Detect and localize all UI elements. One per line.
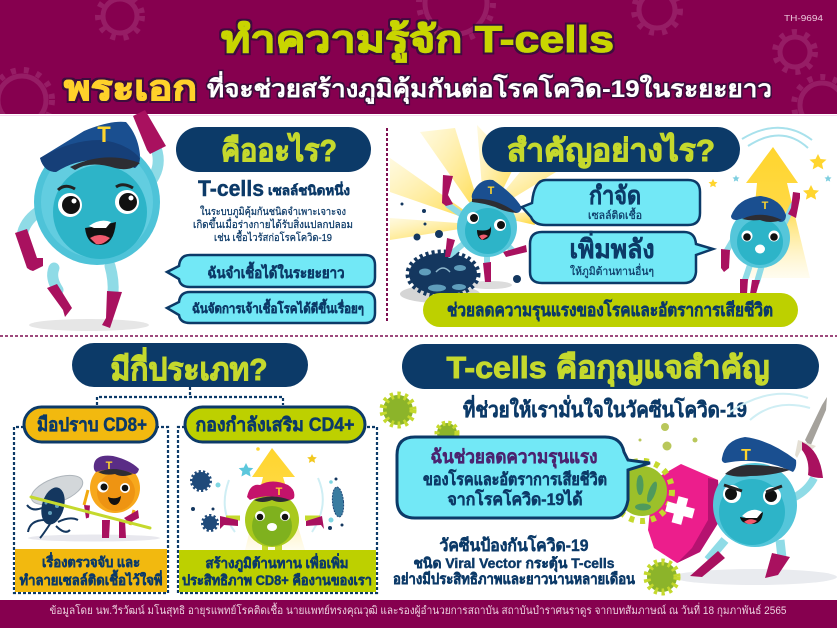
heading pill: key [402,344,819,389]
panel: how many types [14,343,377,593]
large virus on shield [612,461,672,521]
vaccine statement: วัคซีนป้องกันโควิด-19 [440,535,588,555]
dashed connectors [14,387,377,593]
label pill: CD8 [24,407,157,442]
speech bubble: handles pathogens better: ฉันจัดการเจ้าเชื้อโรคได้ดีขึ้นเรื่อยๆ [192,298,364,316]
character: main T-cell waving [15,110,166,331]
speech bubble: long-term memory [167,255,375,287]
heading pill: key: T-cells คือกุญแจสำคัญ [446,350,770,387]
section dividers [0,116,837,336]
character: main T-cell waving: T [97,122,111,147]
illustration: CD8 catches bacterium: T [106,460,113,472]
vaccine statement: ชนิด Viral Vector กระตุ้น T-cells [414,555,615,572]
definition text: T-cells [198,176,264,201]
character: T-cell cheering [721,192,800,294]
label pill: CD4: กองกำลังเสริม CD4+ [196,415,354,436]
green banner: ช่วยลดความรุนแรงของโรคและอัตราการเสียชีวิต [447,299,773,322]
heading pill: why: สำคัญอย่างไร? [507,132,715,169]
code label: TH-9694 [784,13,823,23]
heading pill: why [482,127,740,172]
definition text: เช่น เชื้อไวรัสก่อโรคโควิด-19 [214,230,332,244]
small virus by shield [647,562,677,592]
dark virus defeated [400,202,521,303]
caption block: CD8: เรื่องตรวจจับ และ [42,552,140,570]
definition text: ในระบบภูมิคุ้มกันชนิดจำเพาะเจาะจง [200,205,346,218]
label pill: CD8: มือปราบ CD8+ [37,414,147,436]
heading pill: types [72,343,308,387]
character: T-cell kicking: T [488,185,495,197]
speech bubble: reduces severity [397,437,650,518]
definition text: เกิดขึ้นเมื่อร่างกายได้รับสิ่งแปลกปลอม [193,217,353,231]
label pill: CD4 [185,407,365,442]
arrow and sparkles [708,128,832,278]
subtitle: ที่จะช่วยสร้างภูมิคุ้มกันต่อโรคโควิด-19ในระยะยาว [207,71,772,105]
caption block: CD4: ประสิทธิภาพ CD8+ คืองานของเรา [182,572,372,588]
shield cross [663,494,697,527]
speech bubble: long-term memory: ฉันจำเชื้อได้ในระยะยาว [208,261,344,282]
subtitle [64,69,772,108]
speech bubble: reduces severity: จากโรคโควิด-19ได้ [448,489,582,509]
heading pill: what: คืออะไร? [221,132,337,168]
speech bubble: eliminate: เซลล์ติดเชื้อ [588,207,642,222]
definition text [193,176,353,244]
character: T-cell kicking [442,175,527,282]
subtitle: พระเอก [64,69,197,108]
panel: what is it [15,110,375,331]
speech bubble: reduces severity: ฉันช่วยลดความรุนแรง [430,447,598,469]
speech bubble: eliminate: กำจัด [589,182,641,210]
character: T-cell with sword and shield: T [741,447,751,464]
yellow rays [390,125,556,240]
caption block: CD4: สร้างภูมิต้านทาน เพื่อเพิ่ม [206,553,348,572]
title: ทำความรู้จัก T-cells [221,19,614,63]
speech bubble: boost: เพิ่มพลัง [570,230,654,264]
speech bubble: eliminate [522,180,700,225]
vaccine statement [393,535,636,588]
caption block: CD8 [15,549,167,592]
panel: key to vaccine confidence [383,344,837,592]
footer band [0,600,837,628]
caption block: CD4 [179,550,376,592]
speech bubble: handles pathogens better [167,292,375,323]
illustration: CD4 boost: T [276,486,283,498]
character: T-cell cheering: T [762,200,769,212]
caption block: CD8: ทำลายเซลล์ติดเชื้อไว้ใจพี่ [20,569,162,588]
subheading: ที่ช่วยให้เรามั่นใจในวัคซีนโควิด-19 [463,394,747,422]
green viruses and dots, background [383,395,698,450]
panel: why important [390,125,832,327]
speech bubble: boost: ให้ภูมิต้านทานอื่นๆ [570,263,654,278]
illustration: CD4 boost [191,447,345,550]
vaccine statement: อย่างมีประสิทธิภาพและยาวนานหลายเดือน [393,570,636,588]
speech bubble: reduces severity: ของโรคและอัตราการเสียชีวิต [423,469,607,489]
footer band: ข้อมูลโดย นพ.วีรวัฒน์ มโนสุทธิ อายุรแพทย์โรคติดเชื้อ นายแพทย์ทรงคุณวุฒิ และรองผู้อำนวยการสถาบัน สถาบันบำราศนราดูร จากบทสัมภาษณ์ ณ วันที่ 18 กุมภาพันธ์ 2565 [50,602,786,617]
green banner [423,293,798,327]
heading pill: types: มีกี่ประเภท? [110,347,268,387]
header band [0,0,837,114]
definition text: เซลล์ชนิดหนึ่ง [268,181,350,198]
character: T-cell with sword and shield [648,394,837,585]
heading pill: what [176,127,371,172]
illustration: CD8 catches bacterium [27,456,160,542]
speech bubble: boost [530,230,713,283]
